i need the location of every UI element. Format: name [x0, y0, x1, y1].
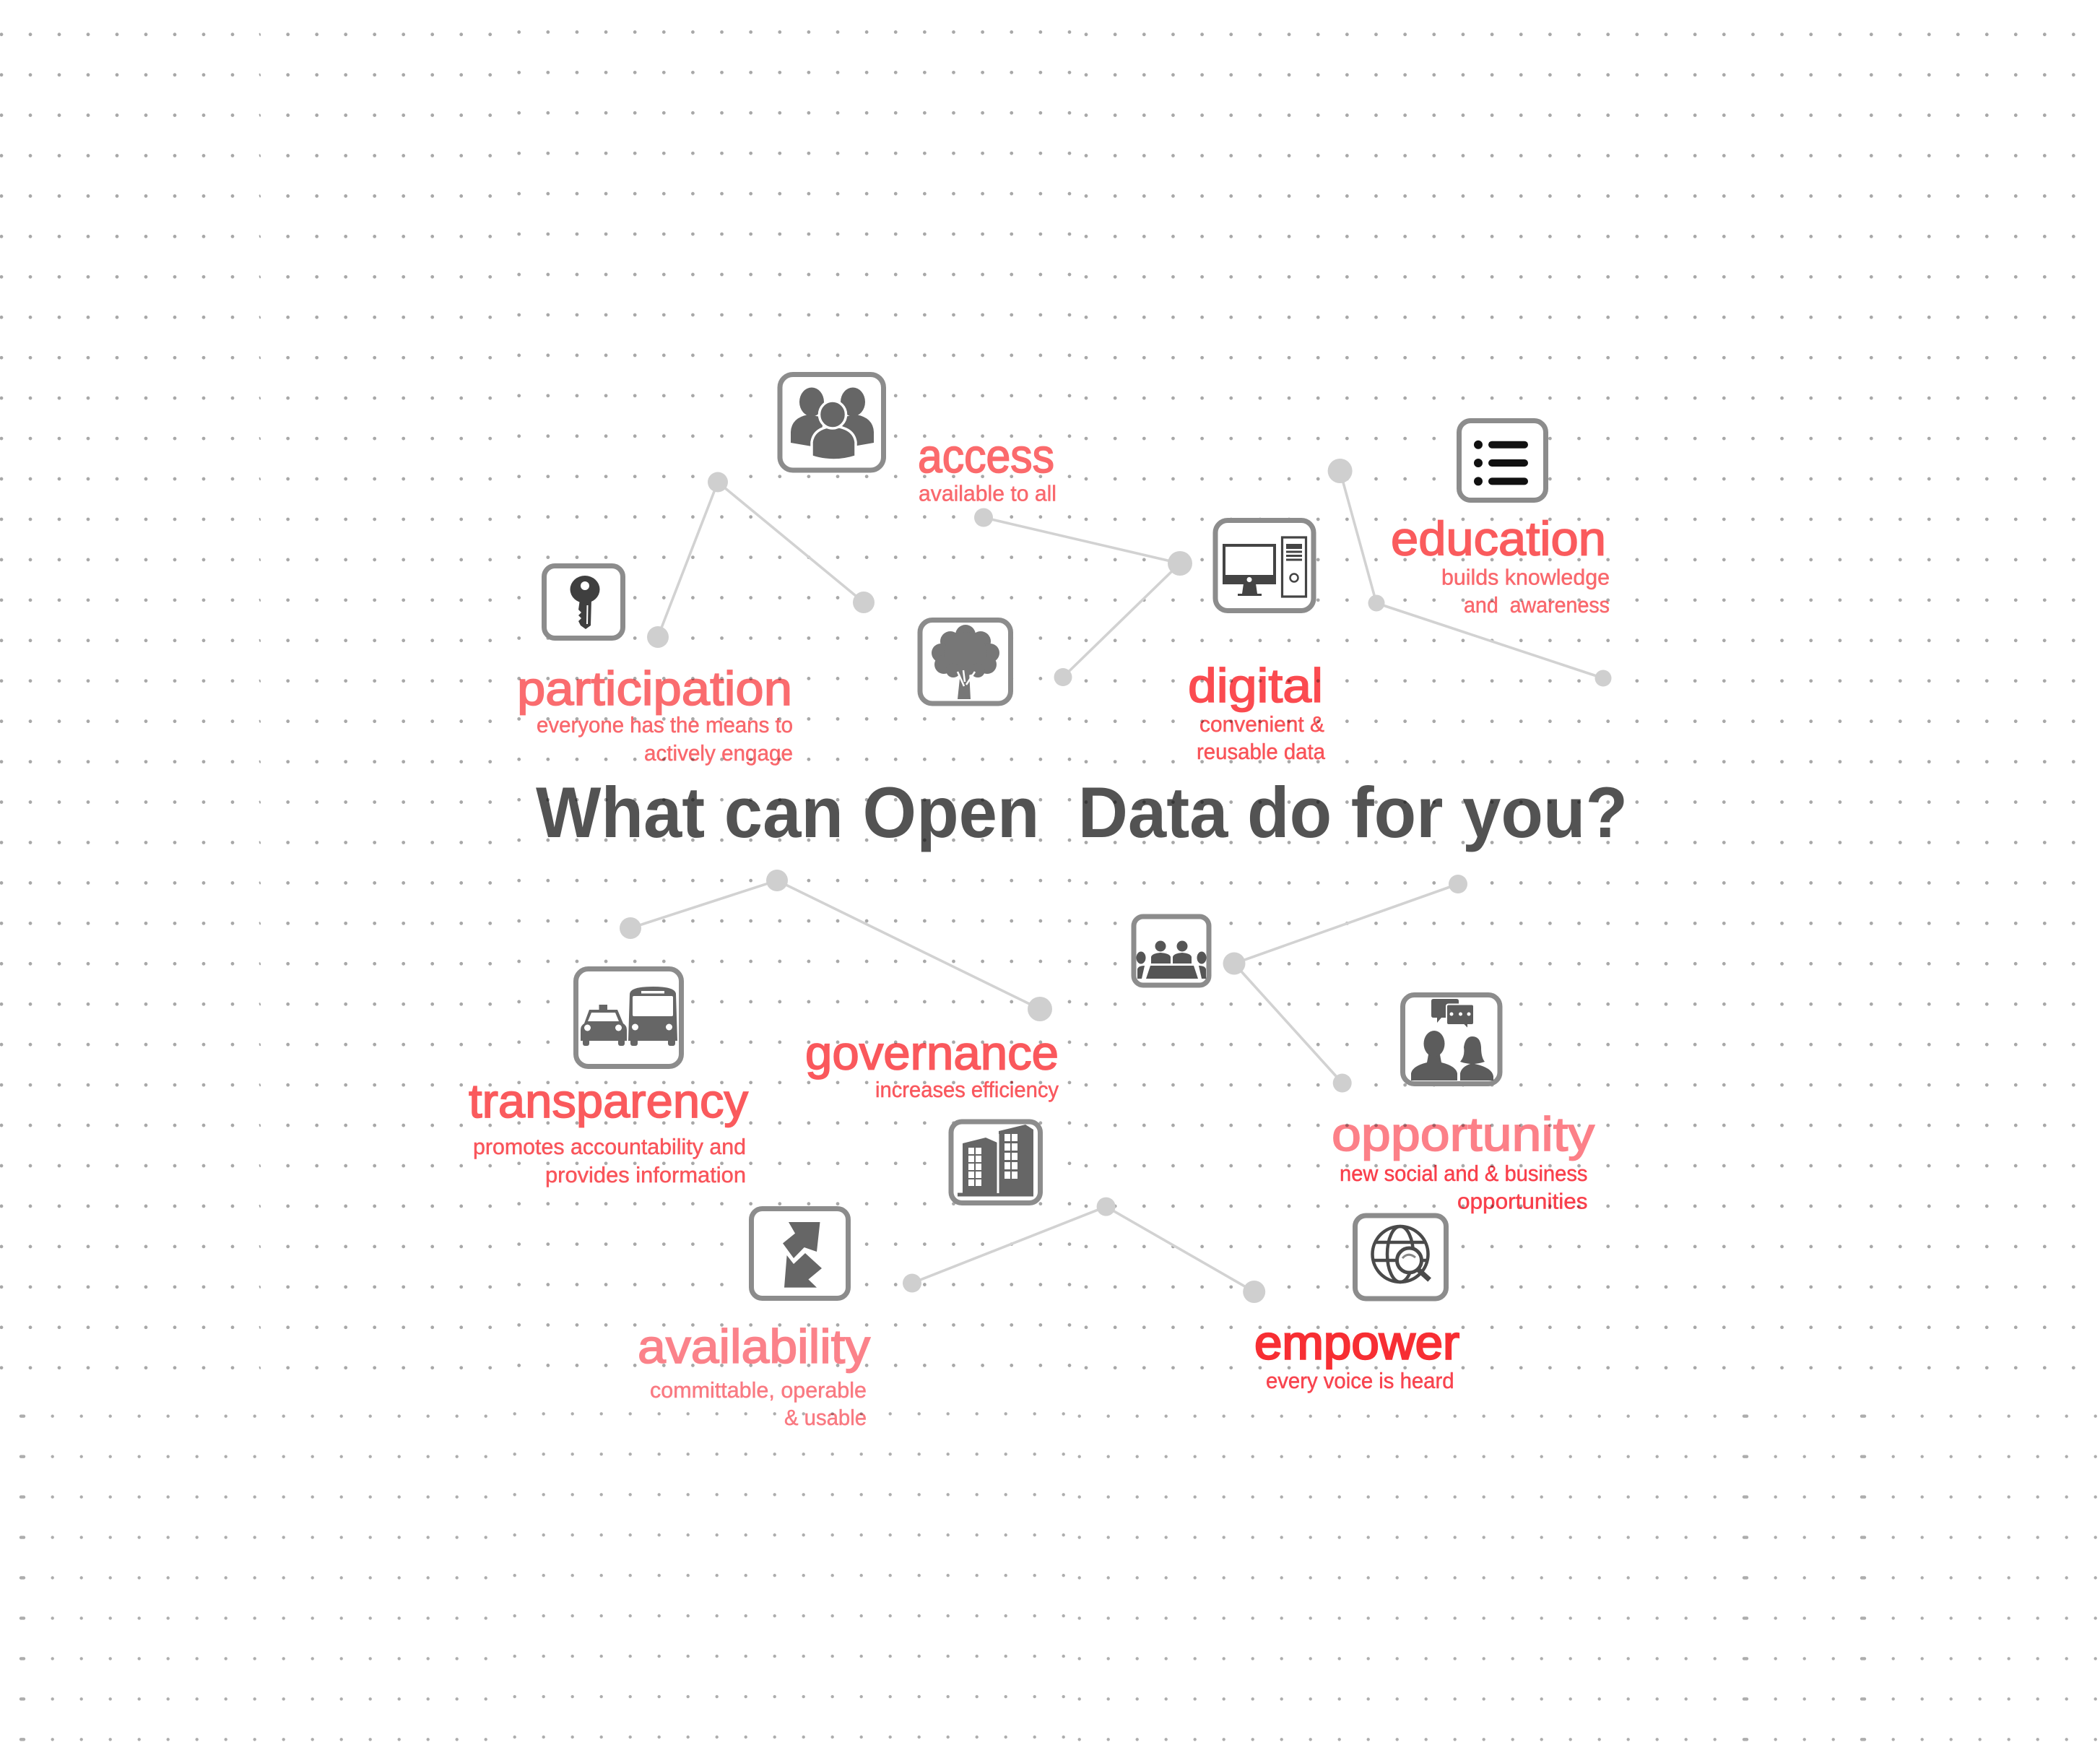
icon: list [1459, 420, 1545, 500]
text: access description: available to all [919, 481, 1056, 506]
icon: meeting table [1134, 917, 1209, 985]
icon: group of people [780, 374, 884, 470]
panel: participation [517, 472, 875, 766]
icon: taxi and bus [576, 969, 682, 1066]
icon: broken arrows [751, 1209, 848, 1299]
text: opportunity description [1340, 1161, 1587, 1214]
text: transparency description [473, 1134, 746, 1187]
icon: globe with magnifier [1355, 1216, 1446, 1299]
heading: digital: digital [1188, 659, 1323, 712]
panel: education [1328, 420, 1612, 686]
heading: transparency: transparency [469, 1074, 748, 1127]
panel: transparency [469, 870, 1052, 1187]
connector: opportunity [1223, 875, 1467, 1092]
connector: education [1328, 459, 1612, 686]
text: governance description: increases efficiency [875, 1077, 1059, 1102]
panel: access [780, 374, 1056, 506]
icon: tree [920, 620, 1011, 703]
connector: availability and empower [903, 1198, 1265, 1303]
panel: opportunity [1134, 875, 1594, 1214]
heading: availability: availability [638, 1320, 870, 1373]
text: opportunity description: opportunities [1457, 1189, 1587, 1214]
heading: education: education [1391, 512, 1606, 566]
title: What can Open Data do for you? [536, 772, 1628, 852]
text: empower description: every voice is heard [1266, 1368, 1454, 1393]
panel: availability [638, 1198, 1265, 1430]
icon: two people talking [1402, 995, 1500, 1083]
text: education description: and awareness [1464, 592, 1610, 618]
text: participation description [537, 712, 793, 766]
text: transparency description: promotes accountability and [473, 1134, 746, 1159]
text: participation description: everyone has the means to [537, 712, 793, 737]
text: availability description [650, 1377, 867, 1430]
heading: governance: governance [805, 1026, 1059, 1080]
text: education description [1441, 565, 1610, 618]
text: digital description [1197, 711, 1326, 764]
text: digital description: convenient & [1199, 711, 1324, 737]
text: transparency description: provides information [545, 1162, 746, 1187]
connector: transparency [620, 870, 1052, 1021]
text: digital description: reusable data [1197, 739, 1326, 764]
icon: buildings [951, 1122, 1040, 1203]
heading: access: access [918, 429, 1054, 482]
heading: empower: empower [1254, 1316, 1459, 1369]
panel: governance [805, 1026, 1059, 1203]
text: availability description: committable, operable [650, 1377, 867, 1403]
text: opportunity description: new social and & business [1340, 1161, 1587, 1186]
connector: participation [647, 472, 875, 648]
heading: opportunity: opportunity [1332, 1107, 1594, 1161]
text: education description: builds knowledge [1441, 565, 1610, 590]
text: availability description: & usable [784, 1405, 867, 1430]
panel: empower [1254, 1216, 1459, 1393]
heading: participation: participation [517, 662, 792, 715]
connector: digital [974, 508, 1192, 686]
icon: key [544, 566, 622, 638]
panel: digital [920, 508, 1326, 764]
icon: desktop computer [1215, 520, 1314, 611]
text: participation description: actively engage [644, 740, 793, 766]
